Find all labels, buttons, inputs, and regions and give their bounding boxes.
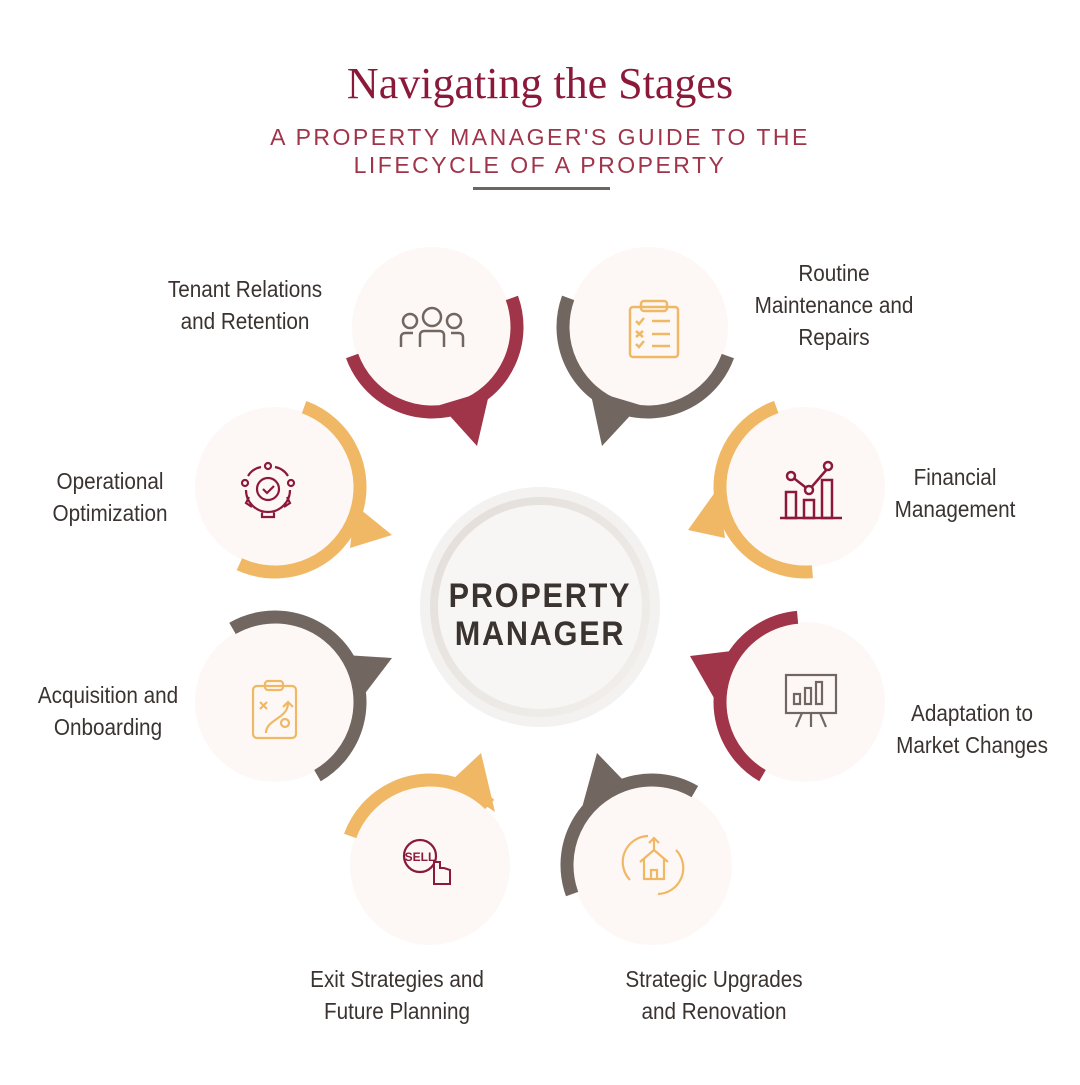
- label: financial: Management: [895, 496, 1015, 522]
- subtitle: [270, 124, 810, 178]
- icon: strategy clipboard: [253, 681, 296, 738]
- subtitle: LIFECYCLE OF A PROPERTY: [354, 152, 726, 178]
- label: acquisition: Acquisition and: [38, 682, 178, 708]
- center circle: MANAGER: [455, 615, 625, 652]
- node: operational: [166, 378, 392, 596]
- label: routine: Routine: [798, 260, 870, 286]
- label: exit: Future Planning: [324, 998, 470, 1024]
- node: strategic upgrades: [543, 753, 761, 974]
- node: tenant relations: [323, 218, 541, 446]
- node: exit strategies: [321, 753, 539, 974]
- label: acquisition: Onboarding: [54, 714, 162, 740]
- icon: sell button: [404, 840, 450, 884]
- label: routine: Maintenance and: [755, 292, 913, 318]
- label: adaptation: [896, 700, 1048, 758]
- icon: presentation board: [786, 675, 836, 727]
- node: financial: [688, 395, 897, 579]
- center circle: [420, 487, 660, 727]
- label: acquisition: [38, 682, 178, 740]
- label: adaptation: Market Changes: [896, 732, 1048, 758]
- node: acquisition: [159, 586, 392, 818]
- label: strategic: and Renovation: [642, 998, 786, 1024]
- label: exit: [310, 966, 484, 1024]
- label: adaptation: Adaptation to: [911, 700, 1033, 726]
- label: tenant: and Retention: [181, 308, 309, 334]
- label: financial: Financial: [914, 464, 996, 490]
- label: routine: [755, 260, 913, 350]
- icon: clipboard: [630, 301, 678, 357]
- subtitle: A PROPERTY MANAGER'S GUIDE TO THE: [270, 124, 810, 150]
- center circle: PROPERTY: [449, 577, 631, 614]
- node: adaptation: [689, 586, 921, 818]
- icon: house renovation: [623, 836, 683, 894]
- label: operational: Operational: [57, 468, 163, 494]
- label: tenant: [168, 276, 322, 334]
- icon: people: [401, 308, 463, 347]
- label: operational: [52, 468, 168, 526]
- label: tenant: Tenant Relations: [168, 276, 322, 302]
- icon: gear check: [242, 463, 294, 517]
- label: routine: Repairs: [798, 324, 870, 350]
- node: routine maintenance: [539, 218, 757, 446]
- icon: bar chart: [780, 462, 842, 518]
- title: Navigating the Stages: [347, 59, 733, 108]
- label: strategic: Strategic Upgrades: [625, 966, 803, 992]
- icon: sell button: SELL: [405, 850, 435, 864]
- label: operational: Optimization: [52, 500, 168, 526]
- label: strategic: [625, 966, 803, 1024]
- label: financial: [895, 464, 1015, 522]
- label: exit: Exit Strategies and: [310, 966, 484, 992]
